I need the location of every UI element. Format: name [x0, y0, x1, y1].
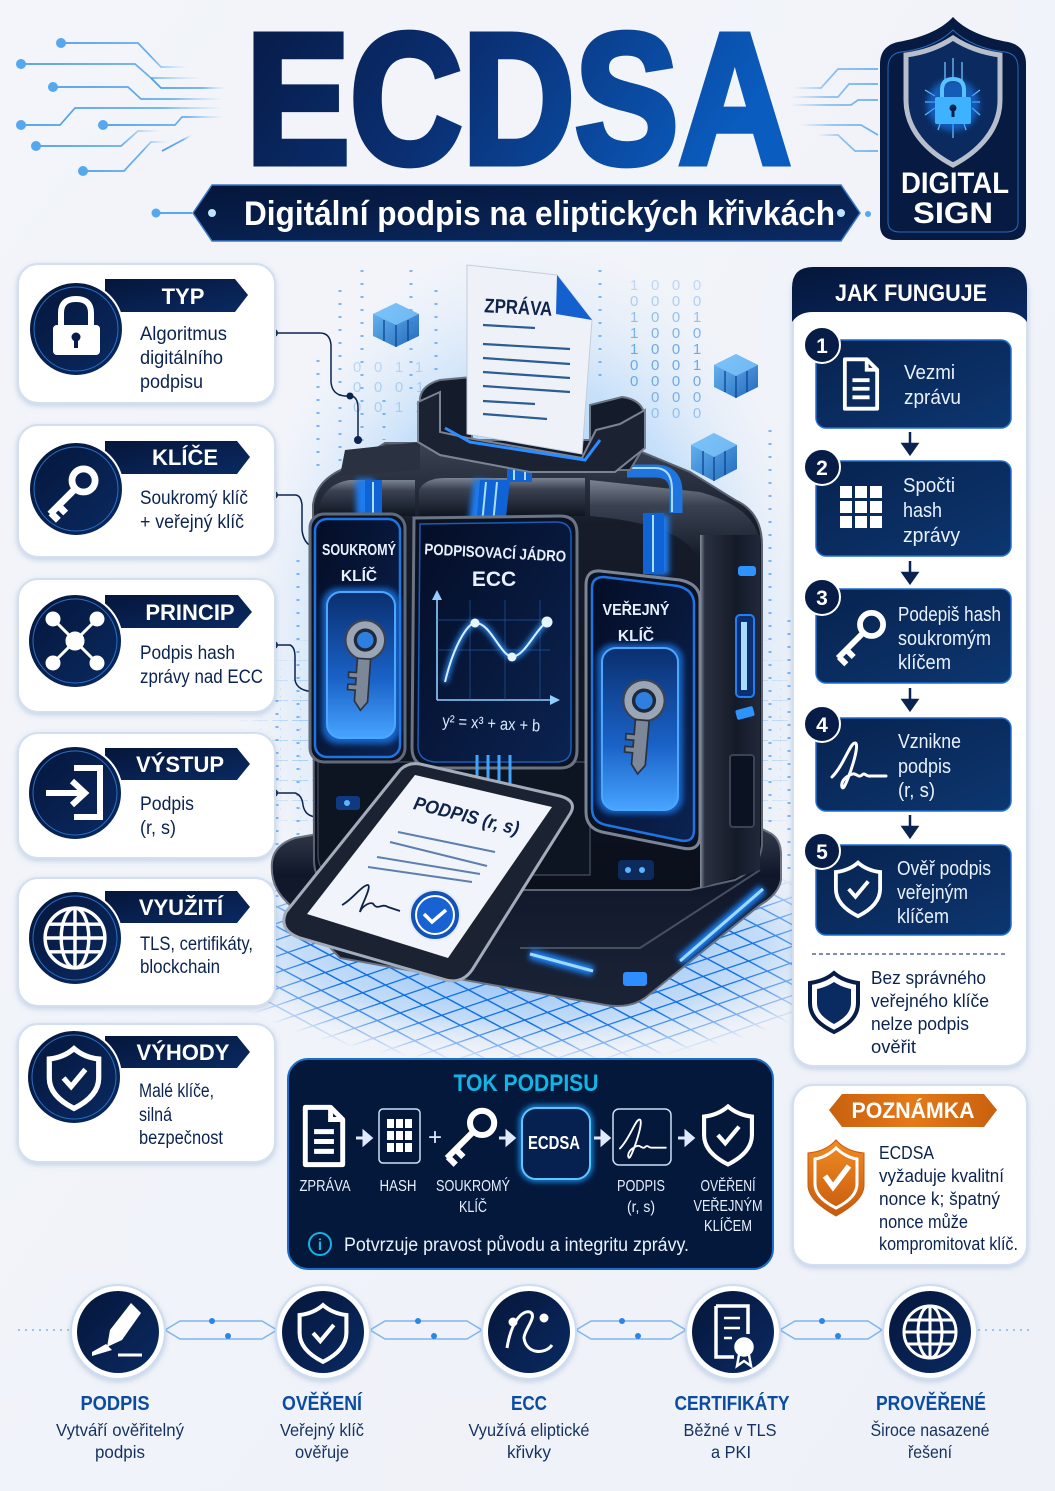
binary rain: 0001 [353, 379, 437, 396]
bottom connector lines [18, 1318, 1030, 1339]
panel heading [792, 267, 1027, 322]
panel: poznamka: nonce k; špatný [879, 1188, 1001, 1209]
step 4 [804, 706, 1011, 811]
panel: poznamka [793, 1085, 1027, 1265]
lower body [318, 762, 590, 875]
pipe [627, 471, 676, 513]
binary rain: 0000 [630, 373, 714, 390]
item: overeni: OVĚŘENÍ [282, 1391, 362, 1415]
icon: lock [53, 299, 100, 355]
warning note: ověřit [871, 1036, 916, 1057]
panel: tok podpisu: HASH [380, 1178, 416, 1195]
panel: ecc core: y² = x³ + ax + b [442, 711, 541, 736]
card: vyhody: VÝHODY [137, 1040, 230, 1065]
step 2: hash [903, 500, 942, 522]
card: typ: TYP [162, 284, 204, 309]
item: proverene: Široce nasazené [870, 1419, 990, 1440]
icon: network [47, 613, 103, 669]
step 1: zprávu [904, 387, 961, 409]
item: proverene: řešení [908, 1442, 952, 1462]
machine background glow [240, 270, 790, 897]
step 4: (r, s) [898, 780, 935, 802]
step 1 [804, 327, 1011, 428]
binary rain: 000 [651, 389, 714, 406]
panel: ecc core [412, 516, 577, 768]
right side rail [700, 535, 760, 888]
step 1: Vezmi [904, 362, 955, 384]
item: podpis: Vytváří ověřitelný [56, 1420, 184, 1440]
circuit decoration right [791, 69, 878, 151]
circuit decoration left [16, 38, 225, 176]
binary rain [353, 277, 714, 422]
arrow [903, 815, 917, 837]
card: typ: digitálního [140, 348, 223, 369]
machine base platform [272, 818, 781, 1006]
card: vyuziti: VYUŽITÍ [139, 895, 224, 920]
card: vystup: VÝSTUP [136, 752, 224, 777]
arrow [903, 561, 917, 583]
icon: key [50, 469, 95, 520]
title: ECDSA [246, 0, 791, 203]
step 3 [804, 579, 1011, 683]
icon: signature [613, 1109, 671, 1165]
icon: certificate [716, 1306, 752, 1366]
binary rain: 0011 [353, 359, 436, 376]
icon: shield [704, 1106, 752, 1164]
card: vyhody: Malé klíče, [139, 1081, 214, 1102]
item: certifikaty: a PKI [711, 1442, 751, 1462]
panel: tok podpisu: KLÍČEM [704, 1216, 752, 1235]
panel: tok podpisu: + [428, 1124, 442, 1151]
machine body [313, 443, 762, 890]
binary rain: 1001 [630, 341, 714, 358]
panel: poznamka: vyžaduje kvalitní [879, 1165, 1005, 1186]
item: overeni: Veřejný klíč [280, 1420, 364, 1440]
step 2 [804, 449, 1011, 556]
paper holder back [420, 377, 645, 470]
panel: poznamka: ECDSA [879, 1142, 935, 1163]
connector lines [270, 329, 362, 817]
card: klice: + veřejný klíč [140, 512, 244, 533]
icon: curve [507, 1312, 552, 1351]
card: typ [18, 264, 275, 403]
card: vystup: Podpis [140, 794, 194, 815]
binary rain: 1000 [630, 277, 714, 294]
warning note: veřejného klíče [871, 990, 989, 1011]
binary rain: 000 [651, 405, 714, 422]
signature tablet [284, 764, 572, 981]
panel: tok podpisu: OVĚŘENÍ [700, 1176, 756, 1195]
paper: zpráva: ZPRÁVA [484, 294, 553, 321]
floor grid [254, 878, 792, 1058]
card: vystup [18, 733, 275, 858]
ecdsa box: ECDSA [528, 1133, 580, 1153]
card: vyuziti: TLS, certifikáty, [140, 934, 253, 955]
card: vyhody [18, 1024, 275, 1162]
card: klice: KLÍČE [152, 445, 218, 470]
item: certifikaty [674, 1285, 790, 1462]
icon: info [309, 1233, 331, 1255]
item: proverene: PROVĚŘENÉ [876, 1391, 986, 1415]
panel: public key: KLÍČ [618, 627, 654, 645]
output connector [477, 755, 510, 795]
panel: poznamka: nonce může [879, 1211, 968, 1232]
card: vyhody: silná [139, 1105, 172, 1126]
icon: shield [49, 1049, 99, 1108]
card: princip: Podpis hash [140, 643, 235, 664]
card: vystup: (r, s) [140, 818, 176, 839]
panel: ecc core: ECC [472, 568, 516, 591]
paper: zpráva [467, 265, 592, 454]
panel: tok podpisu: Potvrzuje pravost původu a integritu zprávy. [344, 1235, 689, 1256]
panel: jak funguje [792, 267, 1027, 1066]
step 1: 1 [816, 335, 828, 358]
step 5: 5 [816, 841, 828, 864]
panel: tok podpisu: TOK PODPISU [454, 1070, 598, 1097]
panel: tok podpisu: VEŘEJNÝM [694, 1196, 762, 1215]
binary rain: 0000 [630, 293, 714, 310]
warning note: Bez správného [871, 967, 986, 988]
step 4: 4 [816, 714, 828, 737]
item: ecc [468, 1285, 590, 1462]
item: overeni [276, 1285, 370, 1462]
step 5: klíčem [897, 906, 949, 928]
panel: private key [310, 514, 405, 762]
floating cubes [373, 303, 758, 481]
card: klice: Soukromý klíč [140, 488, 248, 509]
machine: signing core [272, 265, 781, 1006]
step 3: Podepiš hash [898, 604, 1001, 626]
binary rain: 0011 [353, 399, 436, 416]
panel: tok podpisu: PODPIS [617, 1178, 665, 1195]
panel: public key [586, 571, 700, 849]
panel: ecc core: PODPISOVACÍ JÁDRO [424, 541, 567, 566]
panel: private key: SOUKROMÝ [322, 541, 397, 559]
icon: orange shield [808, 1140, 864, 1216]
item: podpis [56, 1285, 184, 1462]
item: ecc: ECC [511, 1393, 547, 1415]
card: princip: PRINCIP [145, 600, 235, 625]
icon: document [305, 1107, 343, 1165]
item: ecc: křivky [507, 1442, 551, 1462]
icon: hash grid [379, 1109, 420, 1163]
step 4: Vznikne [898, 731, 961, 753]
panel: public key: VEŘEJNÝ [602, 601, 670, 619]
subtitle banner [152, 185, 871, 241]
step 5 [804, 833, 1011, 935]
step 2: 2 [816, 457, 828, 480]
top band highlights [318, 480, 415, 516]
step 2: Spočti [903, 475, 955, 497]
item: podpis: podpis [95, 1442, 145, 1462]
warning note: nelze podpis [871, 1013, 969, 1034]
binary rain: 1001 [630, 309, 714, 326]
item: ecc: Využívá eliptické [468, 1420, 590, 1440]
item: certifikaty: CERTIFIKÁTY [674, 1392, 790, 1415]
item: certifikaty: Běžné v TLS [684, 1420, 776, 1440]
panel: poznamka: POZNÁMKA [852, 1098, 975, 1123]
panel: tok podpisu [288, 1059, 773, 1269]
panel: tok podpisu: SOUKROMÝ [436, 1176, 510, 1195]
card: princip [18, 579, 275, 712]
badge: digital sign: DIGITAL [901, 167, 1009, 200]
step 3: klíčem [898, 652, 951, 674]
panel: private key: KLÍČ [341, 567, 377, 585]
item: overeni: ověřuje [295, 1442, 349, 1462]
card: typ: podpisu [140, 372, 203, 393]
warning note [810, 967, 989, 1057]
card: vyhody: bezpečnost [139, 1128, 224, 1149]
signature tablet: PODPIS (r, s) [411, 793, 521, 840]
icon: info: i [318, 1237, 322, 1254]
panel: tok podpisu: KLÍČ [459, 1197, 487, 1216]
paper holder front [418, 392, 645, 472]
item: proverene [870, 1285, 990, 1462]
icon: globe [45, 908, 105, 968]
icon: key [447, 1111, 494, 1165]
subtitle banner: Digitální podpis na eliptických křivkách [244, 195, 835, 233]
card: klice [18, 425, 275, 557]
icon: pen [92, 1303, 142, 1356]
step 3: soukromým [898, 628, 991, 650]
card: vyuziti: blockchain [140, 957, 220, 978]
panel: poznamka: kompromitovat klíč. [879, 1233, 1018, 1254]
step 5: veřejným [897, 882, 968, 904]
panel: tok podpisu: ZPRÁVA [300, 1176, 351, 1195]
card: vyuziti [18, 878, 275, 1006]
ecdsa box [522, 1108, 590, 1179]
binary rain: 0001 [630, 357, 714, 374]
panel: tok podpisu: (r, s) [627, 1199, 655, 1216]
step 2: zprávy [903, 525, 960, 547]
icon: exit arrow [46, 768, 100, 817]
item: podpis: PODPIS [80, 1393, 150, 1415]
card: typ: Algoritmus [140, 324, 227, 345]
arrow [903, 688, 917, 710]
binary rain: 1000 [630, 325, 714, 342]
step 5: Ověř podpis [897, 858, 991, 880]
panel heading: JAK FUNGUJE [835, 280, 987, 307]
badge: digital sign [880, 17, 1026, 240]
step 4: podpis [898, 756, 951, 778]
badge: digital sign: SIGN [913, 197, 993, 230]
step 3: 3 [816, 587, 828, 610]
arrow [903, 432, 917, 454]
card: princip: zprávy nad ECC [140, 667, 263, 688]
